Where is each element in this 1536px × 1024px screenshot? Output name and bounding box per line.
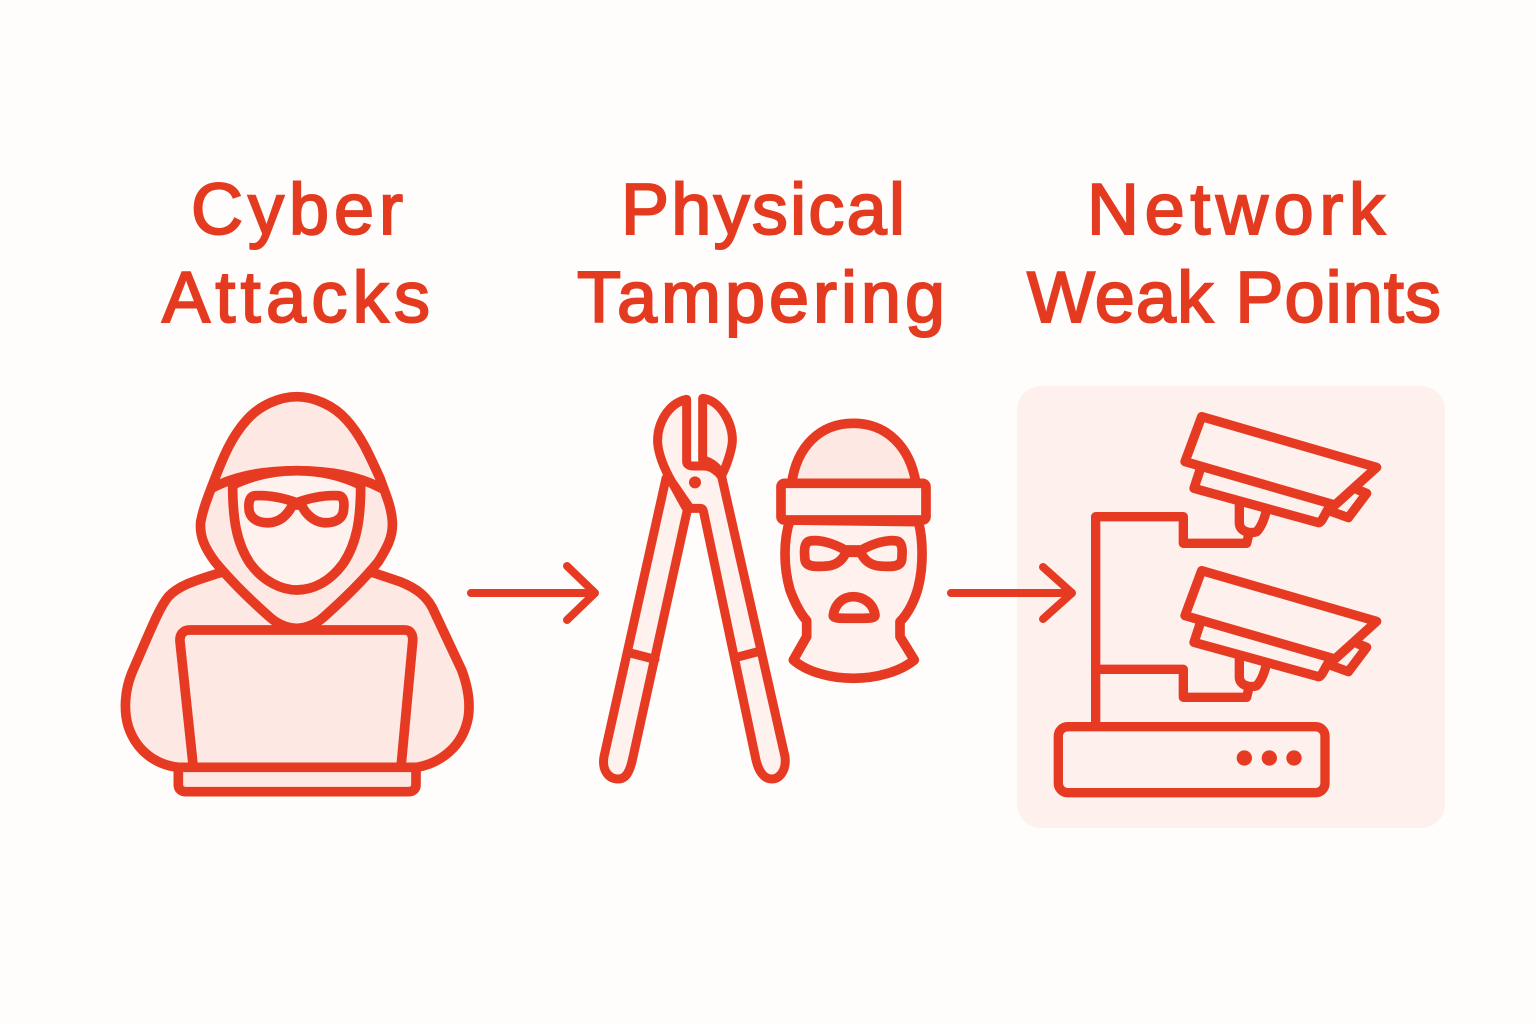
arrow: physical to network <box>951 567 1072 619</box>
heading: Network Weak Points <box>1027 170 1441 338</box>
icon: balaclava intruder <box>781 423 926 678</box>
cutter pivot <box>689 476 701 488</box>
hacker shoulders <box>125 573 469 767</box>
heading: Cyber Attacks: Cyber <box>191 170 403 250</box>
heading: Network Weak Points: Weak Points <box>1027 258 1441 338</box>
cutter left jaw and right handle <box>658 399 785 779</box>
icon: hooded hacker at laptop <box>125 397 469 792</box>
icon: cameras on network recorder <box>1058 417 1377 793</box>
mask hat dome <box>792 423 916 483</box>
panel: network background <box>1017 386 1445 828</box>
heading: Network Weak Points: Network <box>1087 170 1386 250</box>
heading: Cyber Attacks <box>162 170 430 338</box>
mask eye holes <box>805 541 902 567</box>
network recorder <box>1058 727 1325 793</box>
icon: bolt cutters <box>604 398 785 779</box>
lower camera <box>1185 571 1377 687</box>
hacker glasses <box>249 496 344 523</box>
hacker hood <box>200 397 392 628</box>
heading: Physical Tampering: Tampering <box>577 258 945 338</box>
cutter grips <box>632 652 758 659</box>
hacker hood brim <box>212 471 382 488</box>
arrow: cyber to physical <box>471 566 595 620</box>
hacker face <box>233 471 361 590</box>
upper camera <box>1185 417 1377 533</box>
mask hat band <box>781 483 926 520</box>
heading: Physical Tampering <box>577 170 945 338</box>
camera pole and upper arm <box>1096 517 1249 723</box>
cutter left handle <box>604 478 687 779</box>
heading: Cyber Attacks: Attacks <box>162 258 430 338</box>
heading: Physical Tampering: Physical <box>621 170 905 250</box>
cutter right jaw <box>703 398 732 475</box>
laptop screen <box>180 630 413 767</box>
laptop base <box>178 767 416 792</box>
mask head <box>785 520 922 678</box>
camera lower arm <box>1096 669 1249 697</box>
mask mouth hole <box>833 597 875 618</box>
recorder lights <box>1237 750 1302 766</box>
